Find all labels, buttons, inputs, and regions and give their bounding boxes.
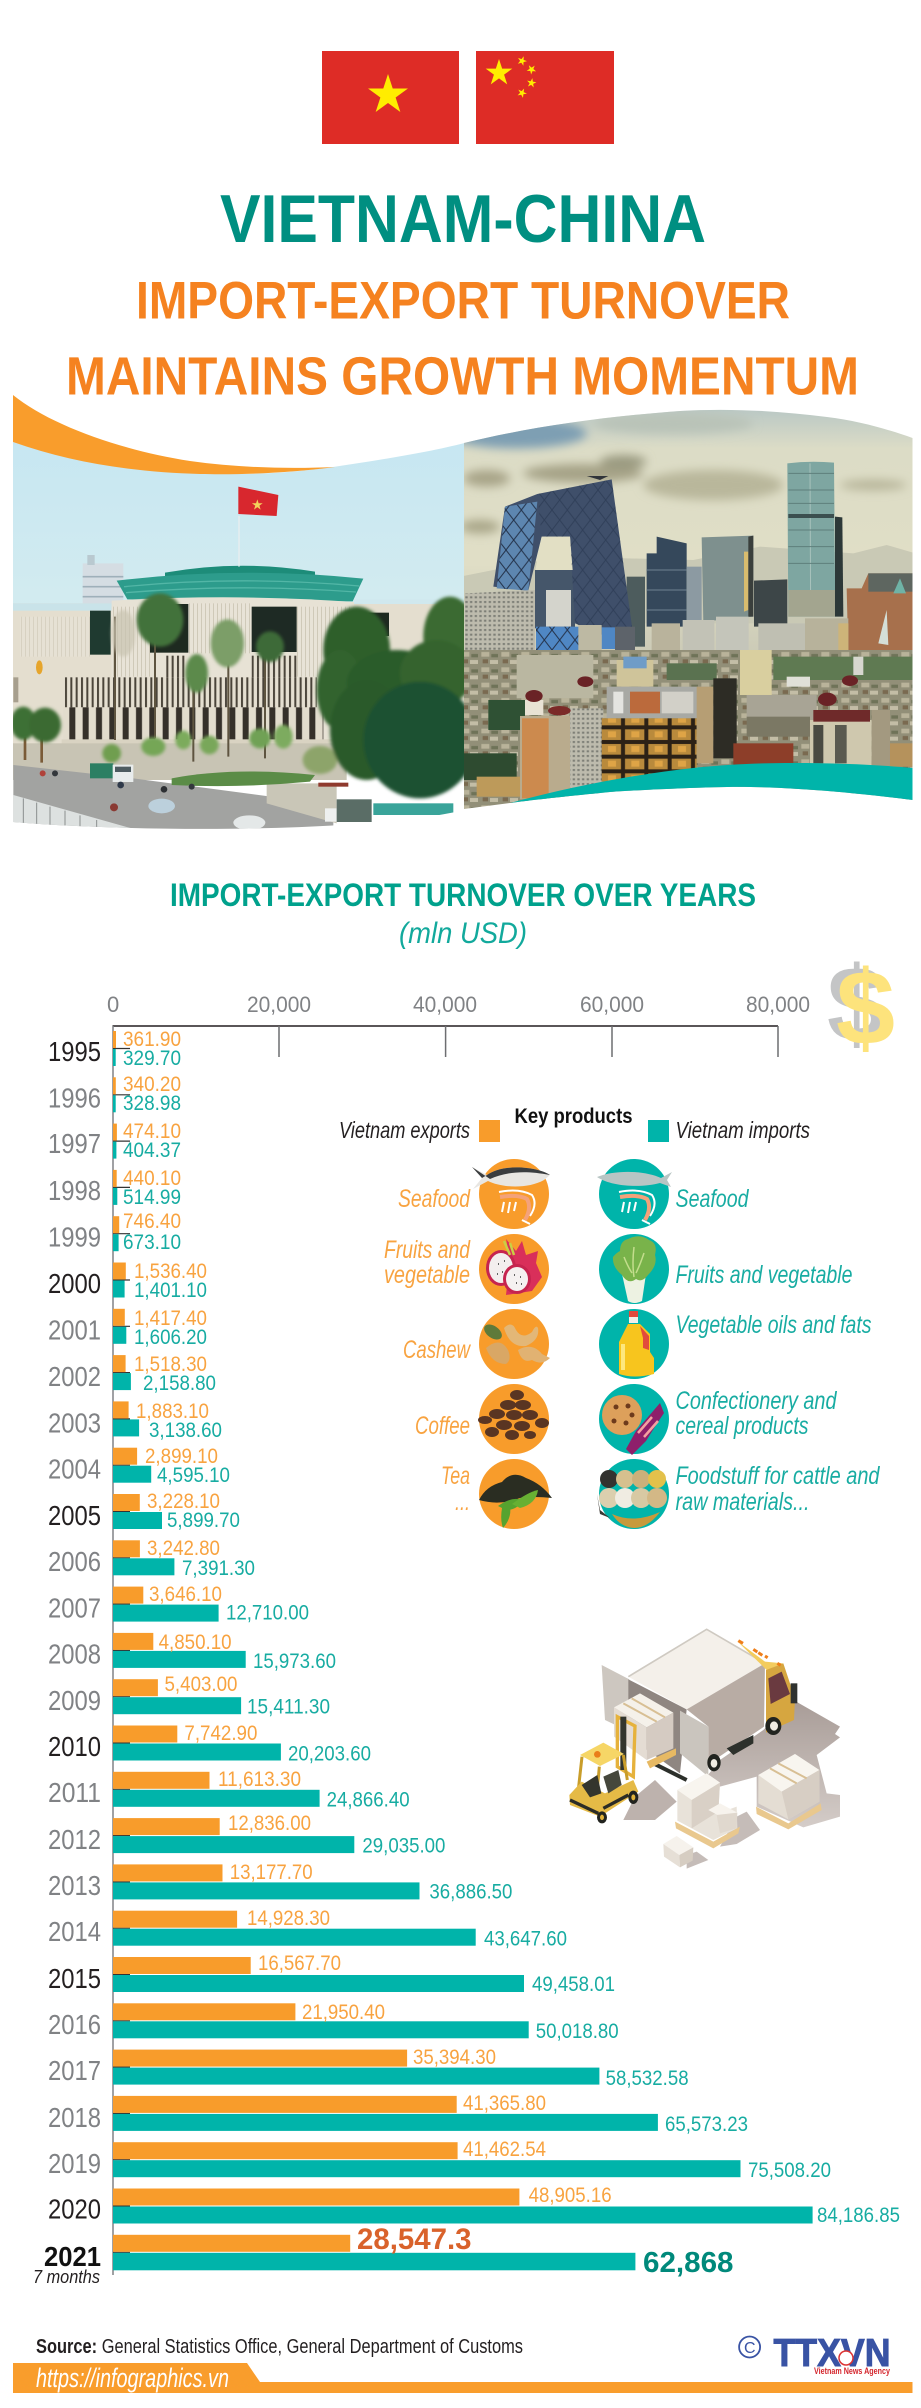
chart heading: IMPORT-EXPORT TURNOVER OVER YEARS [170,877,756,913]
row 2016: 2016 [48,2009,101,2040]
icon: import seafood [597,1159,672,1229]
row 2006: 3,242.80 [147,1536,220,1560]
row 2018: 41,365.80 [463,2091,546,2115]
row 1998: 440.10 [123,1166,181,1190]
row 2010: 20,203.60 [288,1742,371,1766]
row 2004 [48,1444,230,1487]
flags [322,51,614,144]
row 2005: 3,228.10 [147,1489,220,1513]
row 2017: 2017 [48,2055,101,2086]
row 2014: 43,647.60 [484,1927,567,1951]
row 2004: 2004 [48,1454,101,1484]
row 1997: 1997 [48,1128,101,1159]
row 2005: 5,899.70 [167,1508,240,1532]
row 2002 [48,1352,216,1395]
row 2008: 15,973.60 [253,1649,336,1673]
website bar [13,2363,912,2393]
row 2004: 2,899.10 [145,1444,218,1468]
row 1997 [48,1119,181,1162]
bar chart [33,1027,900,2287]
export labels: ... [455,1488,470,1516]
import labels: cereal products [676,1412,808,1440]
row 2003 [48,1399,222,1442]
import labels: raw materials... [676,1488,810,1516]
flag: Vietnam [322,51,459,144]
row 1999: 1999 [48,1222,101,1252]
row 2005: 2005 [48,1500,101,1531]
row 2017: 58,532.58 [606,2066,689,2090]
row 2002: 2002 [48,1361,101,1392]
heading: key products: Key products [514,1105,632,1128]
import labels: Fruits and vegetable [676,1261,852,1289]
website bar: https://infographics.vn [36,2363,229,2393]
row 1997: 404.37 [123,1138,181,1162]
row 2007: 2007 [48,1592,101,1624]
legend: Vietnam imports [648,1117,810,1143]
row 2001: 1,417.40 [134,1306,207,1330]
row 2019 [48,2137,831,2182]
row 2016: 21,950.40 [302,2000,385,2024]
row 2015: 16,567.70 [258,1951,341,1975]
icon: tea leaves [479,1459,552,1529]
row 2021: 62,868 [643,2247,734,2279]
boxes on forks [614,1693,676,1768]
row 1996 [48,1072,181,1115]
icon: dollar sign: $ [836,949,895,1067]
row 2021: 28,547.3 [357,2223,472,2256]
row 2010: 7,742.90 [184,1721,257,1745]
row 1995 [48,1027,181,1070]
row 2009: 2009 [48,1685,101,1716]
row 2003: 1,883.10 [136,1399,209,1423]
row 2002: 1,518.30 [134,1352,207,1376]
export labels: vegetable [384,1261,470,1289]
x axis [107,992,810,2275]
row 2013: 13,177.70 [230,1860,313,1884]
row 2008 [48,1630,336,1673]
row 2015: 49,458.01 [532,1972,615,1996]
row 1998: 514.99 [123,1185,181,1209]
row 2004: 4,595.10 [157,1463,230,1487]
row 2013: 2013 [48,1870,101,1901]
row 2001: 1,606.20 [134,1325,207,1349]
row 2016: 50,018.80 [536,2019,619,2043]
row 2019: 75,508.20 [748,2158,831,2182]
panel: key products [339,1105,880,1529]
row 2016 [48,2000,619,2043]
row 2015 [48,1951,615,1996]
title: VIETNAM-CHINA [220,181,706,257]
source: Source: General Statistics Office, General Department of Customs [36,2336,523,2358]
row 2000 [48,1259,207,1302]
row 2006 [48,1536,255,1580]
row 1999: 746.40 [123,1209,181,1233]
logo: TTXVN: C [744,2340,756,2357]
row 2021: 2021 [44,2241,101,2272]
row 2008: 4,850.10 [159,1630,232,1654]
ground shadows [623,1700,840,1869]
photo: Vietnam National Assembly building [13,442,464,829]
x axis: 80,000 [746,992,810,1017]
row 2018: 2018 [48,2102,101,2133]
illustration: delivery truck and forklift [569,1629,840,1869]
row 2006: 2006 [48,1546,101,1577]
row 2005 [48,1489,240,1532]
teal swoosh [510,763,912,803]
unit subtitle: (mln USD) [399,917,527,950]
row 2008: 2008 [48,1638,101,1670]
row 1999: 673.10 [123,1230,181,1254]
icon: cookie and candy [599,1384,669,1455]
row 1998 [48,1166,181,1209]
logo: TTXVN: TTXVN [774,2332,890,2375]
icon: export seafood [472,1159,550,1229]
row 2003: 2003 [48,1408,101,1438]
row 2012: 2012 [48,1824,101,1855]
row 2011: 11,613.30 [218,1767,301,1791]
row 1996: 1996 [48,1082,101,1114]
row 2015: 2015 [48,1963,101,1994]
row 2000: 1,536.40 [134,1259,207,1283]
row 2010 [48,1721,371,1766]
row 2009 [48,1672,330,1719]
flag: China [476,51,614,144]
row 2021: 7 months [33,2267,100,2287]
row 2003: 3,138.60 [149,1418,222,1442]
row 2014 [48,1906,567,1951]
row 1999 [48,1209,181,1254]
row 2012: 12,836.00 [228,1811,311,1835]
row 1996: 340.20 [123,1072,181,1096]
icon: grain sacks [597,1459,669,1529]
row 2007: 3,646.10 [149,1582,222,1606]
row 2020 [48,2183,900,2227]
export labels: Tea [441,1462,470,1490]
icon: dollar sign: $ [827,945,886,1063]
export labels: Coffee [415,1412,470,1440]
x axis: 0 [107,992,119,1017]
title: IMPORT-EXPORT TURNOVER [136,272,790,330]
row 2011: 24,866.40 [327,1788,410,1812]
icon: cashew [479,1309,550,1379]
row 2019: 41,462.54 [463,2137,546,2161]
row 2020: 84,186.85 [817,2203,900,2227]
row 2007: 12,710.00 [226,1600,309,1624]
truck box [602,1629,765,1780]
icon: dragon fruit [479,1234,549,1304]
row 2010: 2010 [48,1731,101,1762]
row 2012 [48,1811,445,1858]
import labels: Seafood [676,1185,749,1213]
row 2020: 2020 [48,2194,101,2224]
row 2021 [33,2223,734,2287]
photo: Beijing skyline [464,410,912,809]
row 2000: 2000 [48,1268,101,1299]
row 2001 [48,1306,207,1349]
row 2018: 65,573.23 [665,2112,748,2136]
pallet: right [756,1754,822,1829]
row 2011: 2011 [48,1777,101,1808]
row 2009: 5,403.00 [164,1672,238,1696]
row 2001: 2001 [48,1314,101,1346]
export labels: Cashew [403,1336,471,1364]
row 1996: 328.98 [123,1091,181,1115]
x axis: 40,000 [413,992,477,1017]
row 2006: 7,391.30 [182,1556,255,1580]
single box [663,1836,693,1867]
row 2007 [48,1582,309,1624]
row 2020: 48,905.16 [529,2183,612,2207]
legend: Vietnam exports: Vietnam exports [339,1117,470,1143]
import labels: Vegetable oils and fats [676,1311,872,1339]
title [66,181,859,406]
footer [13,2332,912,2393]
orange swoosh [13,395,335,474]
row 2014: 2014 [48,1916,101,1947]
export labels: Fruits and [384,1236,471,1264]
export labels: Seafood [398,1185,471,1213]
icon: coffee beans [478,1384,549,1454]
icon: oil bottle [599,1309,669,1379]
row 2013: 36,886.50 [429,1880,512,1904]
logo: TTXVN: Vietnam News Agency [814,2366,890,2376]
row 1997: 474.10 [123,1119,181,1143]
x axis: 60,000 [580,992,644,1017]
forklift [569,1717,638,1823]
legend: Vietnam imports: Vietnam imports [676,1117,810,1143]
row 1995: 329.70 [123,1046,181,1070]
import labels [676,1185,880,1516]
x axis: 20,000 [247,992,311,1017]
import labels: Confectionery and [676,1387,837,1415]
row 2018 [48,2091,748,2136]
row 2014: 14,928.30 [247,1906,330,1930]
row 2002: 2,158.80 [143,1371,216,1395]
truck cab [707,1641,797,1771]
row 1995: 361.90 [123,1027,181,1051]
row 1995: 1995 [48,1036,101,1067]
row 2012: 29,035.00 [362,1834,445,1858]
row 2013 [48,1860,512,1904]
row 2017 [48,2045,689,2090]
photo banner [0,390,921,860]
row 2009: 15,411.30 [247,1695,330,1719]
row 1998: 1998 [48,1175,101,1206]
row 2011 [48,1767,410,1812]
row 2000: 1,401.10 [134,1278,207,1302]
row 2019: 2019 [48,2148,101,2179]
pallet: centre [675,1773,740,1848]
row 2017: 35,394.30 [413,2045,496,2069]
export labels [384,1185,471,1516]
icon: cabbage [599,1234,669,1304]
